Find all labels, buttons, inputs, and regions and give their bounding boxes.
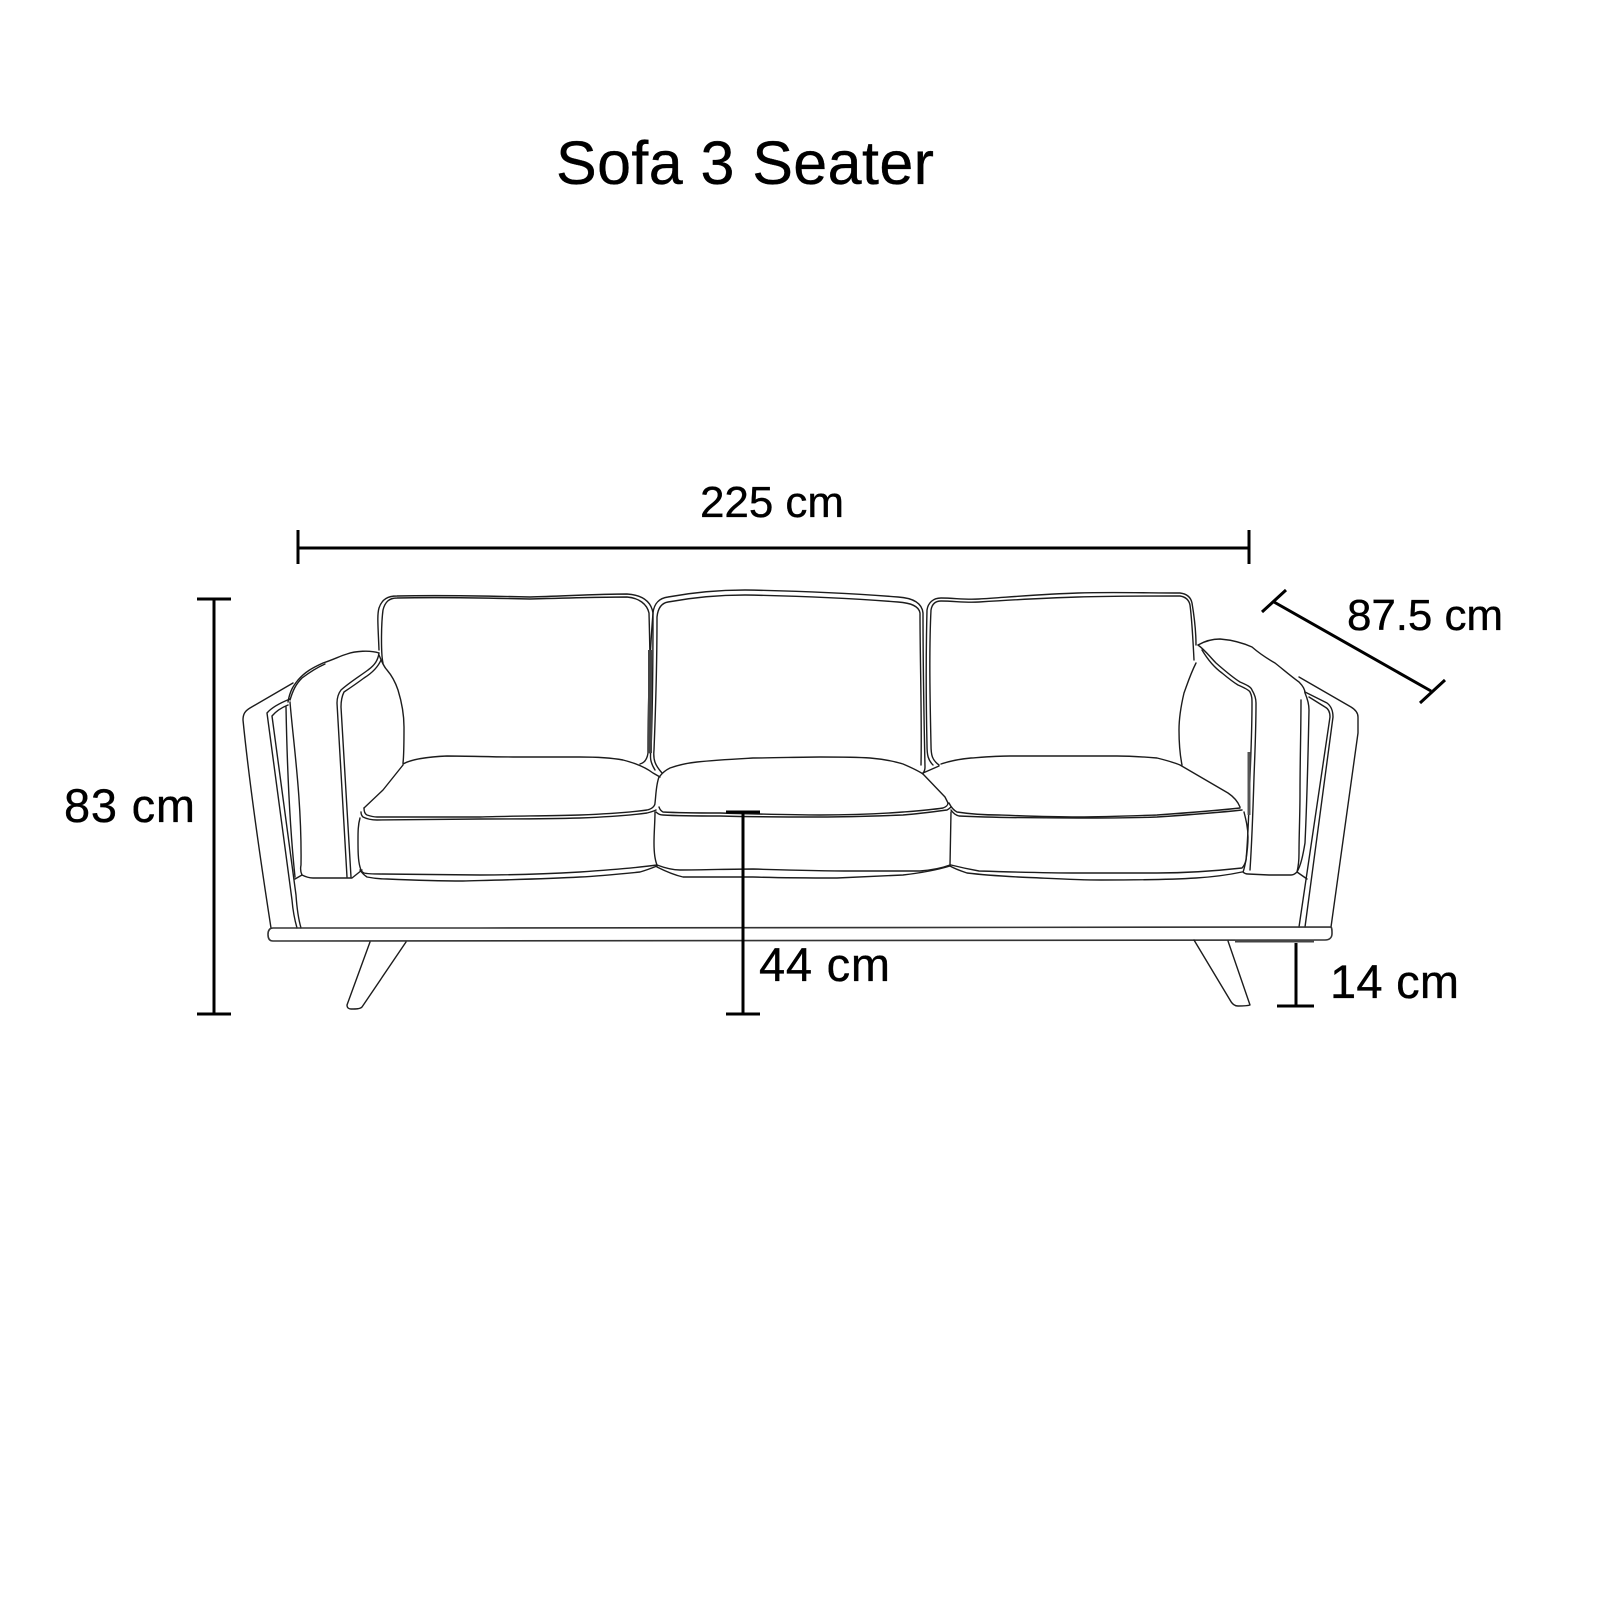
- dimension: seat height 44 cm: 44 cm: [759, 938, 890, 991]
- right arm: [1179, 639, 1358, 927]
- dimension: leg height 14 cm: [1277, 943, 1459, 1008]
- right leg: [1194, 940, 1250, 1006]
- left leg: [347, 942, 406, 1009]
- center back cushion: [650, 590, 925, 773]
- dimension: width 225 cm: 225 cm: [700, 478, 844, 527]
- dimension: seat height 44 cm: [726, 812, 890, 1014]
- left seat cushion: [358, 756, 660, 881]
- dimension: height 83 cm: 83 cm: [64, 779, 195, 832]
- right seat cushion: [923, 756, 1248, 880]
- sofa line drawing: [243, 590, 1358, 1009]
- dimension: height 83 cm: [64, 599, 231, 1014]
- dimension: depth 87.5 cm: 87.5 cm: [1347, 591, 1503, 640]
- left arm: [243, 651, 404, 928]
- title: Sofa 3 Seater: [556, 129, 934, 197]
- wooden base rail: [268, 927, 1332, 941]
- dimension: leg height 14 cm: 14 cm: [1330, 955, 1459, 1008]
- dimension: depth 87.5 cm: [1262, 590, 1503, 703]
- left back cushion: [378, 594, 653, 764]
- shading bars: [650, 650, 1314, 941]
- dimension: width 225 cm: [298, 478, 1249, 564]
- center seat cushion: [656, 757, 951, 878]
- right back cushion: [926, 593, 1196, 765]
